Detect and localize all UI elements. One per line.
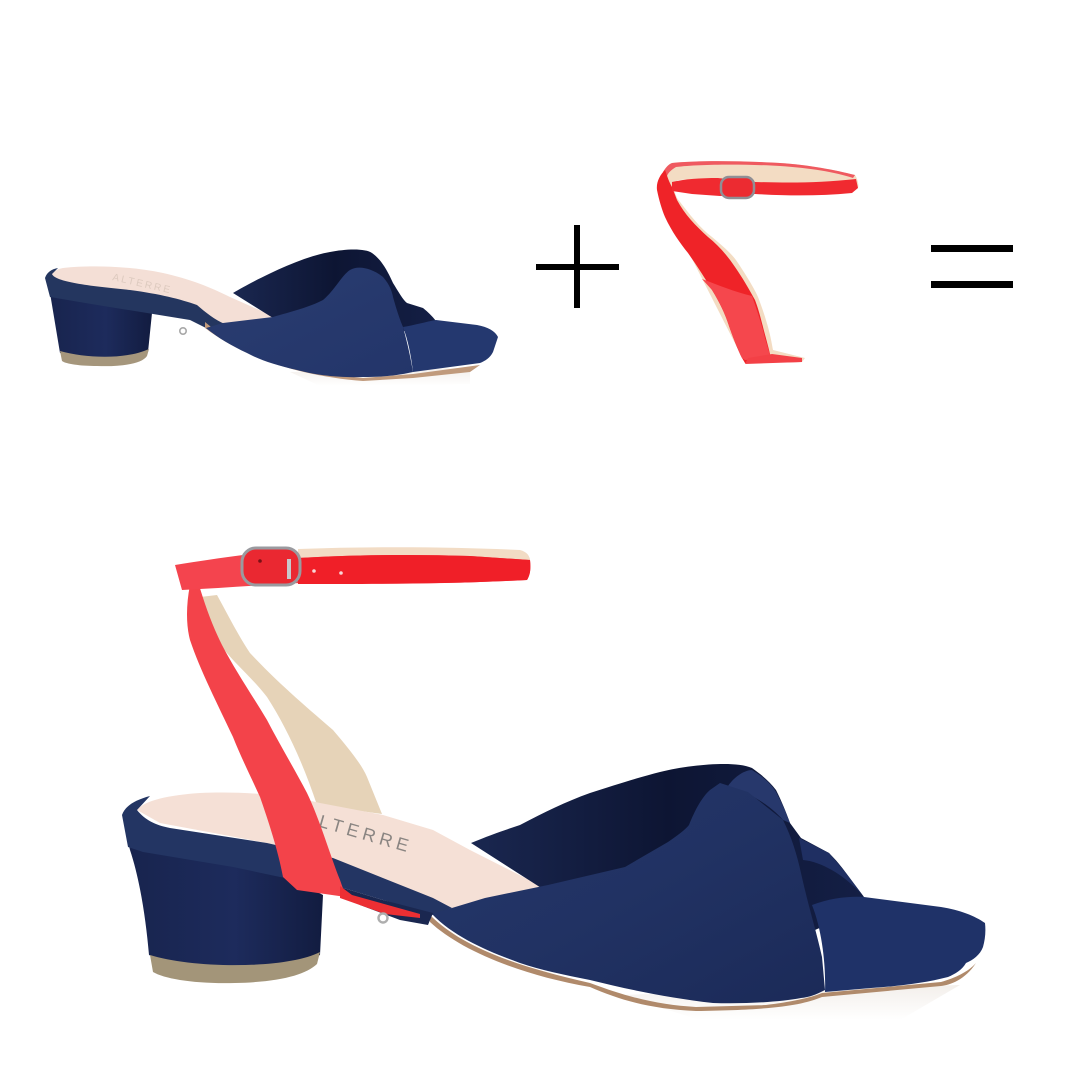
rim <box>122 796 452 915</box>
heel <box>128 842 323 966</box>
heel <box>50 293 152 359</box>
top shoe: denim slide <box>45 250 498 386</box>
short band <box>672 178 858 196</box>
inner denim <box>471 764 864 930</box>
outsole <box>430 915 976 1011</box>
sling back <box>200 595 382 814</box>
buckle <box>721 177 754 198</box>
plus sign <box>536 225 619 308</box>
main vamp <box>432 783 825 1003</box>
toe bed <box>403 320 498 372</box>
long strap <box>657 170 802 363</box>
ring <box>180 328 186 334</box>
rim <box>45 268 225 330</box>
bottom shoe: denim sandal with red ankle strap <box>122 547 985 1020</box>
ring <box>378 914 388 922</box>
sole below arch <box>205 322 480 381</box>
top strap: red patent <box>657 161 858 364</box>
ground shadow <box>620 985 960 1020</box>
heel tan base <box>150 952 320 983</box>
main vamp <box>206 268 413 377</box>
brand text on insole: ALTERRE <box>301 807 415 857</box>
ground shadow <box>290 368 470 386</box>
lower strap <box>187 585 346 897</box>
brand text on insole: ALTERRE <box>111 272 173 297</box>
denim heel strap cuff <box>340 887 433 925</box>
rolled top edge <box>728 770 790 823</box>
buckle <box>242 548 300 585</box>
insole <box>50 266 275 326</box>
right flap <box>799 838 864 897</box>
inner denim <box>233 250 436 332</box>
ankle strap <box>175 550 530 590</box>
equals sign <box>931 245 1013 288</box>
strap tail <box>340 886 420 918</box>
insole <box>137 793 545 912</box>
toe bed <box>812 897 985 992</box>
outer rim and inner lining <box>657 161 858 363</box>
